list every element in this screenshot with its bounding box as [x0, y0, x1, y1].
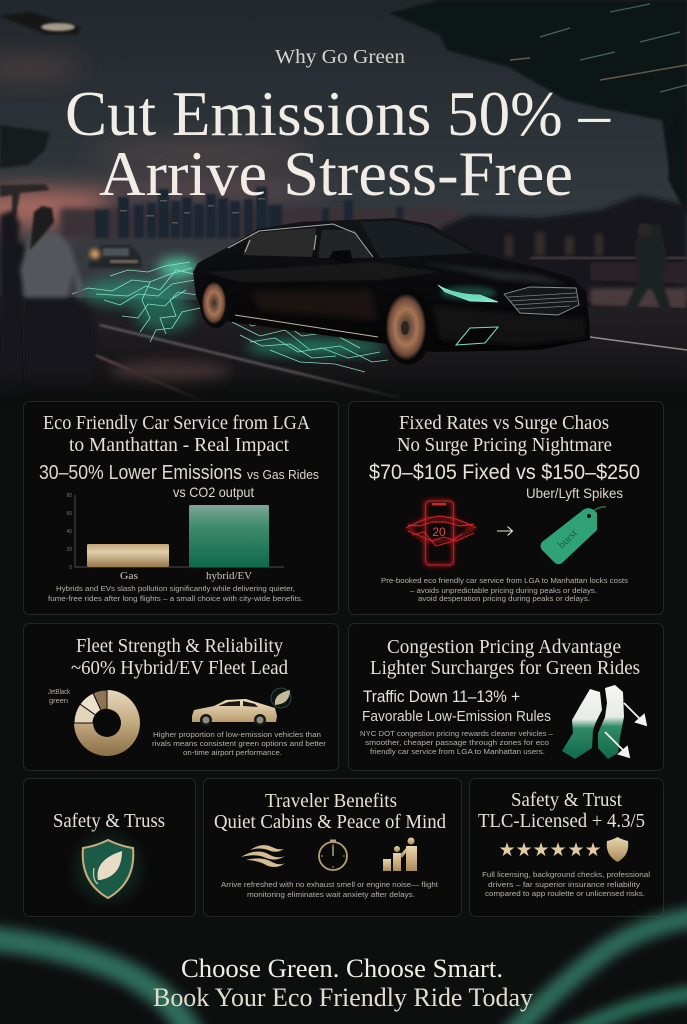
road: [0, 296, 687, 400]
icon: green price tag: [540, 507, 606, 564]
heading: ~60% Hybrid/EV Fleet Lead: [71, 657, 288, 679]
side windows: [243, 228, 316, 257]
chrome line: [228, 224, 373, 257]
stat: vs Gas Rides: [247, 467, 319, 482]
star rating: ★: [584, 839, 602, 861]
heading: [214, 790, 446, 833]
donut chart: [74, 690, 140, 756]
bar chart: 80: [66, 493, 72, 499]
panel: safety and trust: [470, 778, 664, 916]
heading: Fixed Rates vs Surge Chaos: [399, 412, 609, 434]
description: monitoring eliminates wait anxiety after delays.: [247, 890, 415, 899]
description: compared to app roulette or unlicensed risks.: [485, 889, 645, 898]
street lamp: [0, 12, 80, 34]
heading: Quiet Cabins & Peace of Mind: [214, 811, 446, 833]
bar chart: 60: [66, 511, 72, 517]
icon: quiet waves: [241, 845, 285, 867]
black limousine: [193, 218, 590, 365]
icon: phone with surge price: [406, 501, 476, 565]
description: NYC DOT congestion pricing rewards cleaner vehicles –: [360, 729, 554, 738]
heading: Lighter Surcharges for Green Rides: [370, 657, 640, 679]
bar chart: [66, 493, 284, 582]
description: rivals means consistent green options and better: [152, 739, 327, 748]
hero photo: limousine on a city road at dusk: [0, 0, 687, 402]
city skyline: [95, 187, 403, 238]
description: [482, 870, 650, 898]
star rating: ★: [567, 839, 585, 861]
icon: leaf badge: [271, 688, 291, 708]
description: [381, 576, 628, 603]
stat: 30–50% Lower Emissions: [39, 462, 242, 484]
description: [48, 584, 303, 603]
description: [152, 730, 327, 757]
heading: Fleet Strength & Reliability: [76, 635, 283, 657]
description: on-time airport performance.: [183, 748, 282, 757]
headlight: [438, 285, 498, 302]
stat: [362, 687, 551, 725]
icon: shield with leaf: [66, 826, 150, 910]
heading: TLC-Licensed + 4.3/5: [478, 810, 645, 832]
title: Arrive Stress-Free: [99, 139, 573, 209]
bar chart: hybrid/EV: [206, 571, 253, 582]
eyebrow: Why Go Green: Why Go Green: [275, 46, 405, 68]
blurred pedestrian at left: [0, 206, 96, 395]
icon: family: [383, 838, 417, 871]
heading: [397, 412, 612, 456]
star rating: ★: [498, 839, 516, 861]
top right structure: [390, 0, 687, 215]
blurred crowd and railing at right: [440, 195, 687, 312]
description: [221, 880, 439, 899]
call to action: [153, 954, 533, 1012]
description: [360, 729, 554, 756]
star rating: [498, 839, 602, 861]
description: fume-free rides after long flights – a small choice with city-wide benefits.: [48, 594, 303, 603]
panel: eco friendly car service: [24, 402, 338, 614]
description: Arrive refreshed with no exhaust smell or engine noise— flight: [221, 880, 439, 889]
distant car with headlights: [88, 245, 142, 268]
heading: [43, 412, 311, 456]
description: friendly car service from LGA to Manhattan users.: [370, 747, 545, 756]
arrow: [497, 526, 512, 536]
front wheel: [384, 289, 432, 365]
title: Cut Emissions 50% –: [65, 79, 610, 149]
description: Higher proportion of low-emission vehicles than: [153, 730, 321, 739]
stat: Favorable Low-Emission Rules: [362, 708, 551, 725]
panel: traveler benefits: [204, 778, 462, 916]
heading: [71, 635, 288, 679]
bar chart: 40: [66, 529, 72, 535]
grille: [504, 287, 579, 315]
call to action: Choose Green. Choose Smart.: [181, 954, 503, 983]
stat: [39, 462, 319, 500]
heading: Safety & Trust: [511, 789, 622, 811]
stat: Traffic Down 11–13% +: [363, 687, 520, 706]
footer green light swooshes: [0, 915, 687, 1024]
star rating: ★: [549, 839, 567, 861]
description: smoother, cheaper passage through zones for eco: [365, 738, 549, 747]
price comparison: $70–$105 Fixed vs $150–$250: [369, 461, 640, 484]
horizon haze: [60, 208, 460, 238]
heading: [478, 789, 645, 832]
heading: No Surge Pricing Nightmare: [397, 434, 612, 456]
heading: Traveler Benefits: [265, 790, 397, 812]
fog light: [456, 327, 498, 345]
mirror: [329, 250, 353, 264]
rear wheel: [200, 278, 232, 328]
stat: vs CO2 output: [173, 484, 254, 500]
description: avoid desperation pricing during peaks or delays.: [418, 594, 590, 603]
star rating: ★: [532, 839, 550, 861]
call to action: Book Your Eco Friendly Ride Today: [153, 983, 533, 1012]
heading: to Manthattan - Real Impact: [69, 434, 289, 456]
sunset clouds: [0, 58, 330, 228]
title: [65, 79, 610, 209]
price comparison: [369, 461, 640, 501]
left tower structure: [0, 125, 50, 168]
icon: gold shield: [607, 837, 628, 862]
icon: gold car: [192, 699, 277, 726]
donut legend: [48, 689, 70, 705]
description: Pre-booked eco friendly car service from LGA to Manhattan locks costs: [381, 576, 628, 585]
star rating: ★: [515, 839, 533, 861]
map with traffic arrows: [562, 685, 646, 759]
heading: [370, 636, 640, 679]
sill line: [235, 315, 378, 337]
price comparison: Uber/Lyft Spikes: [526, 485, 623, 501]
donut legend: JetBlack: [48, 689, 70, 696]
bar chart: Gas: [120, 571, 138, 582]
heading: Eco Friendly Car Service from LGA: [43, 412, 311, 434]
bar chart: 20: [66, 547, 72, 553]
body reflections: [205, 262, 440, 282]
icon: green price tag: burst: [556, 527, 580, 551]
windshield: [360, 221, 475, 258]
description: Hybrids and EVs slash pollution significantly while delivering quieter,: [56, 584, 295, 593]
green energy trail: [72, 258, 388, 372]
description: – avoids unpredictable pricing during peaks or delays.: [410, 586, 597, 595]
icon: stopwatch: [319, 840, 347, 870]
heading: Congestion Pricing Advantage: [387, 636, 621, 658]
hero bottom fade: [0, 372, 687, 402]
panel: congestion pricing: [348, 624, 664, 770]
description: Full licensing, background checks, professional: [482, 870, 650, 879]
panel: safety and truss: [24, 778, 196, 916]
description: drivers – far superior insurance reliability: [488, 880, 640, 889]
donut legend: green: [49, 698, 68, 705]
panel: fixed rates vs surge chaos: [348, 402, 664, 614]
icon: phone with surge price: 20: [432, 525, 446, 539]
panel: fleet strength: [24, 624, 338, 770]
heading: Safety & Truss: [53, 810, 165, 832]
bar chart: 0: [69, 565, 72, 571]
